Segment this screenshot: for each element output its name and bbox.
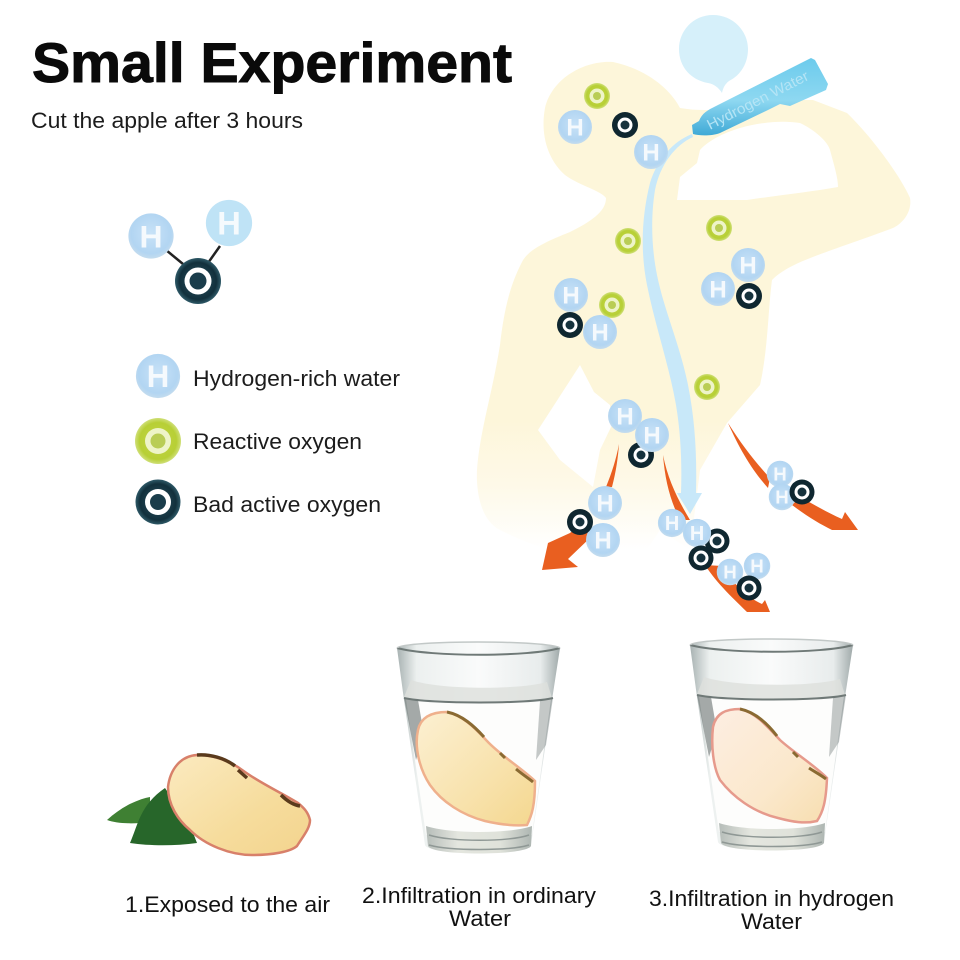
subtitle: Cut the apple after 3 hours <box>31 108 303 133</box>
orange arrow: centre <box>663 455 770 612</box>
speech bubble <box>679 15 748 93</box>
legend label: hydrogen-rich water: Hydrogen-rich water <box>193 366 400 391</box>
caption 2: 2.Infiltration in ordinary <box>362 883 596 908</box>
centre arrow molecules: H <box>690 523 704 545</box>
apple flesh <box>168 755 310 855</box>
right arrow molecules <box>767 461 814 510</box>
chest molecules: H <box>591 320 609 346</box>
legend label: bad active oxygen: Bad active oxygen <box>193 492 381 517</box>
apple slice (ordinary water) <box>417 712 535 825</box>
browned edge <box>197 755 300 806</box>
abdomen molecules: H <box>616 404 634 430</box>
white gap between arm and head <box>677 122 838 200</box>
caption 1: 1.Exposed to the air <box>125 892 330 917</box>
caption 2: Water <box>449 906 511 931</box>
apple slice exposed to the air <box>107 755 310 855</box>
legend icon: bad active oxygen <box>136 480 180 524</box>
bottle: Hydrogen Water <box>692 58 828 135</box>
apple slice (hydrogen water) <box>712 709 827 822</box>
hydrogen atom right: H <box>217 205 241 242</box>
abdomen molecules <box>608 374 720 468</box>
chest molecules: H <box>739 252 757 280</box>
right arrow molecules: H <box>773 464 787 485</box>
left arrow molecules: H <box>594 528 612 554</box>
glass with apple in hydrogen water <box>690 639 853 850</box>
leaves <box>107 788 197 845</box>
centre arrow molecules: H <box>723 562 737 583</box>
title: Small Experiment <box>32 31 512 94</box>
left arrow molecules: H <box>596 490 614 518</box>
legend label: reactive oxygen: Reactive oxygen <box>193 429 362 454</box>
caption 3: Water <box>741 909 802 934</box>
legend icon: hydrogen-rich water: H <box>147 359 169 394</box>
centre arrow molecules: H <box>750 556 764 577</box>
water molecule diagram <box>128 200 252 304</box>
white gap between arm and torso <box>538 365 612 487</box>
orange arrow: left <box>542 444 619 570</box>
bottle: Hydrogen Water: Hydrogen Water <box>705 68 812 134</box>
legend icon: reactive oxygen <box>135 418 181 464</box>
oxygen atom <box>175 258 221 304</box>
chest molecules: H <box>709 276 727 304</box>
head molecules <box>558 83 668 169</box>
right arrow molecules: H <box>775 487 789 508</box>
human body silhouette <box>477 62 910 560</box>
caption 3: 3.Infiltration in hydrogen <box>649 886 894 911</box>
centre arrow molecules: H <box>665 513 679 535</box>
abdomen molecules: H <box>643 422 661 450</box>
left arrow molecules <box>567 486 622 557</box>
chest molecules: H <box>562 282 580 310</box>
glass with apple in ordinary water <box>397 642 560 854</box>
legend <box>135 354 400 524</box>
centre arrow molecules <box>658 509 770 600</box>
hydrogen atom left: H <box>139 218 163 254</box>
molecules inside body <box>554 83 814 600</box>
chest molecules <box>554 215 765 349</box>
head molecules: H <box>642 140 660 166</box>
water stream arrow <box>643 134 702 514</box>
head molecules: H <box>566 114 584 142</box>
orange arrow: right <box>728 423 858 530</box>
legend icon: hydrogen-rich water <box>136 354 180 398</box>
